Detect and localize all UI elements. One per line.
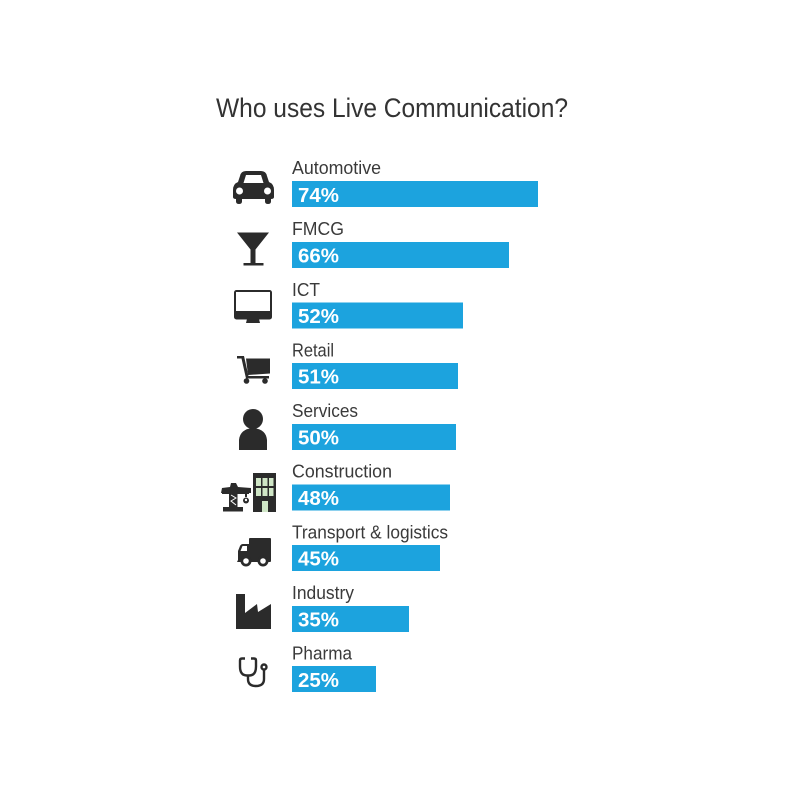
value: 52% xyxy=(298,306,339,328)
label: Construction xyxy=(292,462,392,482)
row: Automotive xyxy=(233,158,538,207)
row: ICT xyxy=(234,280,463,328)
bar xyxy=(292,181,538,207)
row: Pharma xyxy=(240,644,376,692)
icon: truck xyxy=(237,538,271,566)
bar xyxy=(292,545,440,571)
label: Industry xyxy=(292,583,354,603)
icon: person xyxy=(239,409,267,450)
icon: monitor xyxy=(234,290,272,323)
value: 45% xyxy=(298,548,339,570)
icon: car xyxy=(233,171,274,204)
label: FMCG xyxy=(292,219,344,239)
label: Retail xyxy=(292,340,334,360)
label: Pharma xyxy=(292,644,353,664)
bar xyxy=(292,666,376,692)
icon: crane and building xyxy=(221,473,276,512)
value: 35% xyxy=(298,610,339,632)
row: Transport & logistics xyxy=(237,522,448,571)
icon: shopping cart xyxy=(237,356,270,384)
row: FMCG xyxy=(237,219,509,268)
icon: cocktail glass xyxy=(237,232,269,266)
value: 51% xyxy=(298,366,339,388)
row: Retail xyxy=(237,340,458,389)
label: Automotive xyxy=(292,158,381,178)
bar xyxy=(292,424,456,450)
bar xyxy=(292,363,458,389)
row: Construction xyxy=(221,462,450,512)
value: 50% xyxy=(298,428,339,450)
label: Services xyxy=(292,401,358,421)
title: Who uses Live Communication? xyxy=(216,93,568,123)
value: 74% xyxy=(298,185,339,207)
row: Services xyxy=(239,401,456,450)
label: Transport & logistics xyxy=(292,522,448,542)
row: Industry xyxy=(236,583,409,632)
label: ICT xyxy=(292,280,320,300)
bar xyxy=(292,606,409,632)
value: 48% xyxy=(298,488,339,510)
bar xyxy=(292,302,463,328)
icon: stethoscope xyxy=(240,658,266,686)
icon: factory xyxy=(236,594,271,629)
value: 25% xyxy=(298,670,339,692)
value: 66% xyxy=(298,246,339,268)
bar xyxy=(292,484,450,510)
bar xyxy=(292,242,509,268)
